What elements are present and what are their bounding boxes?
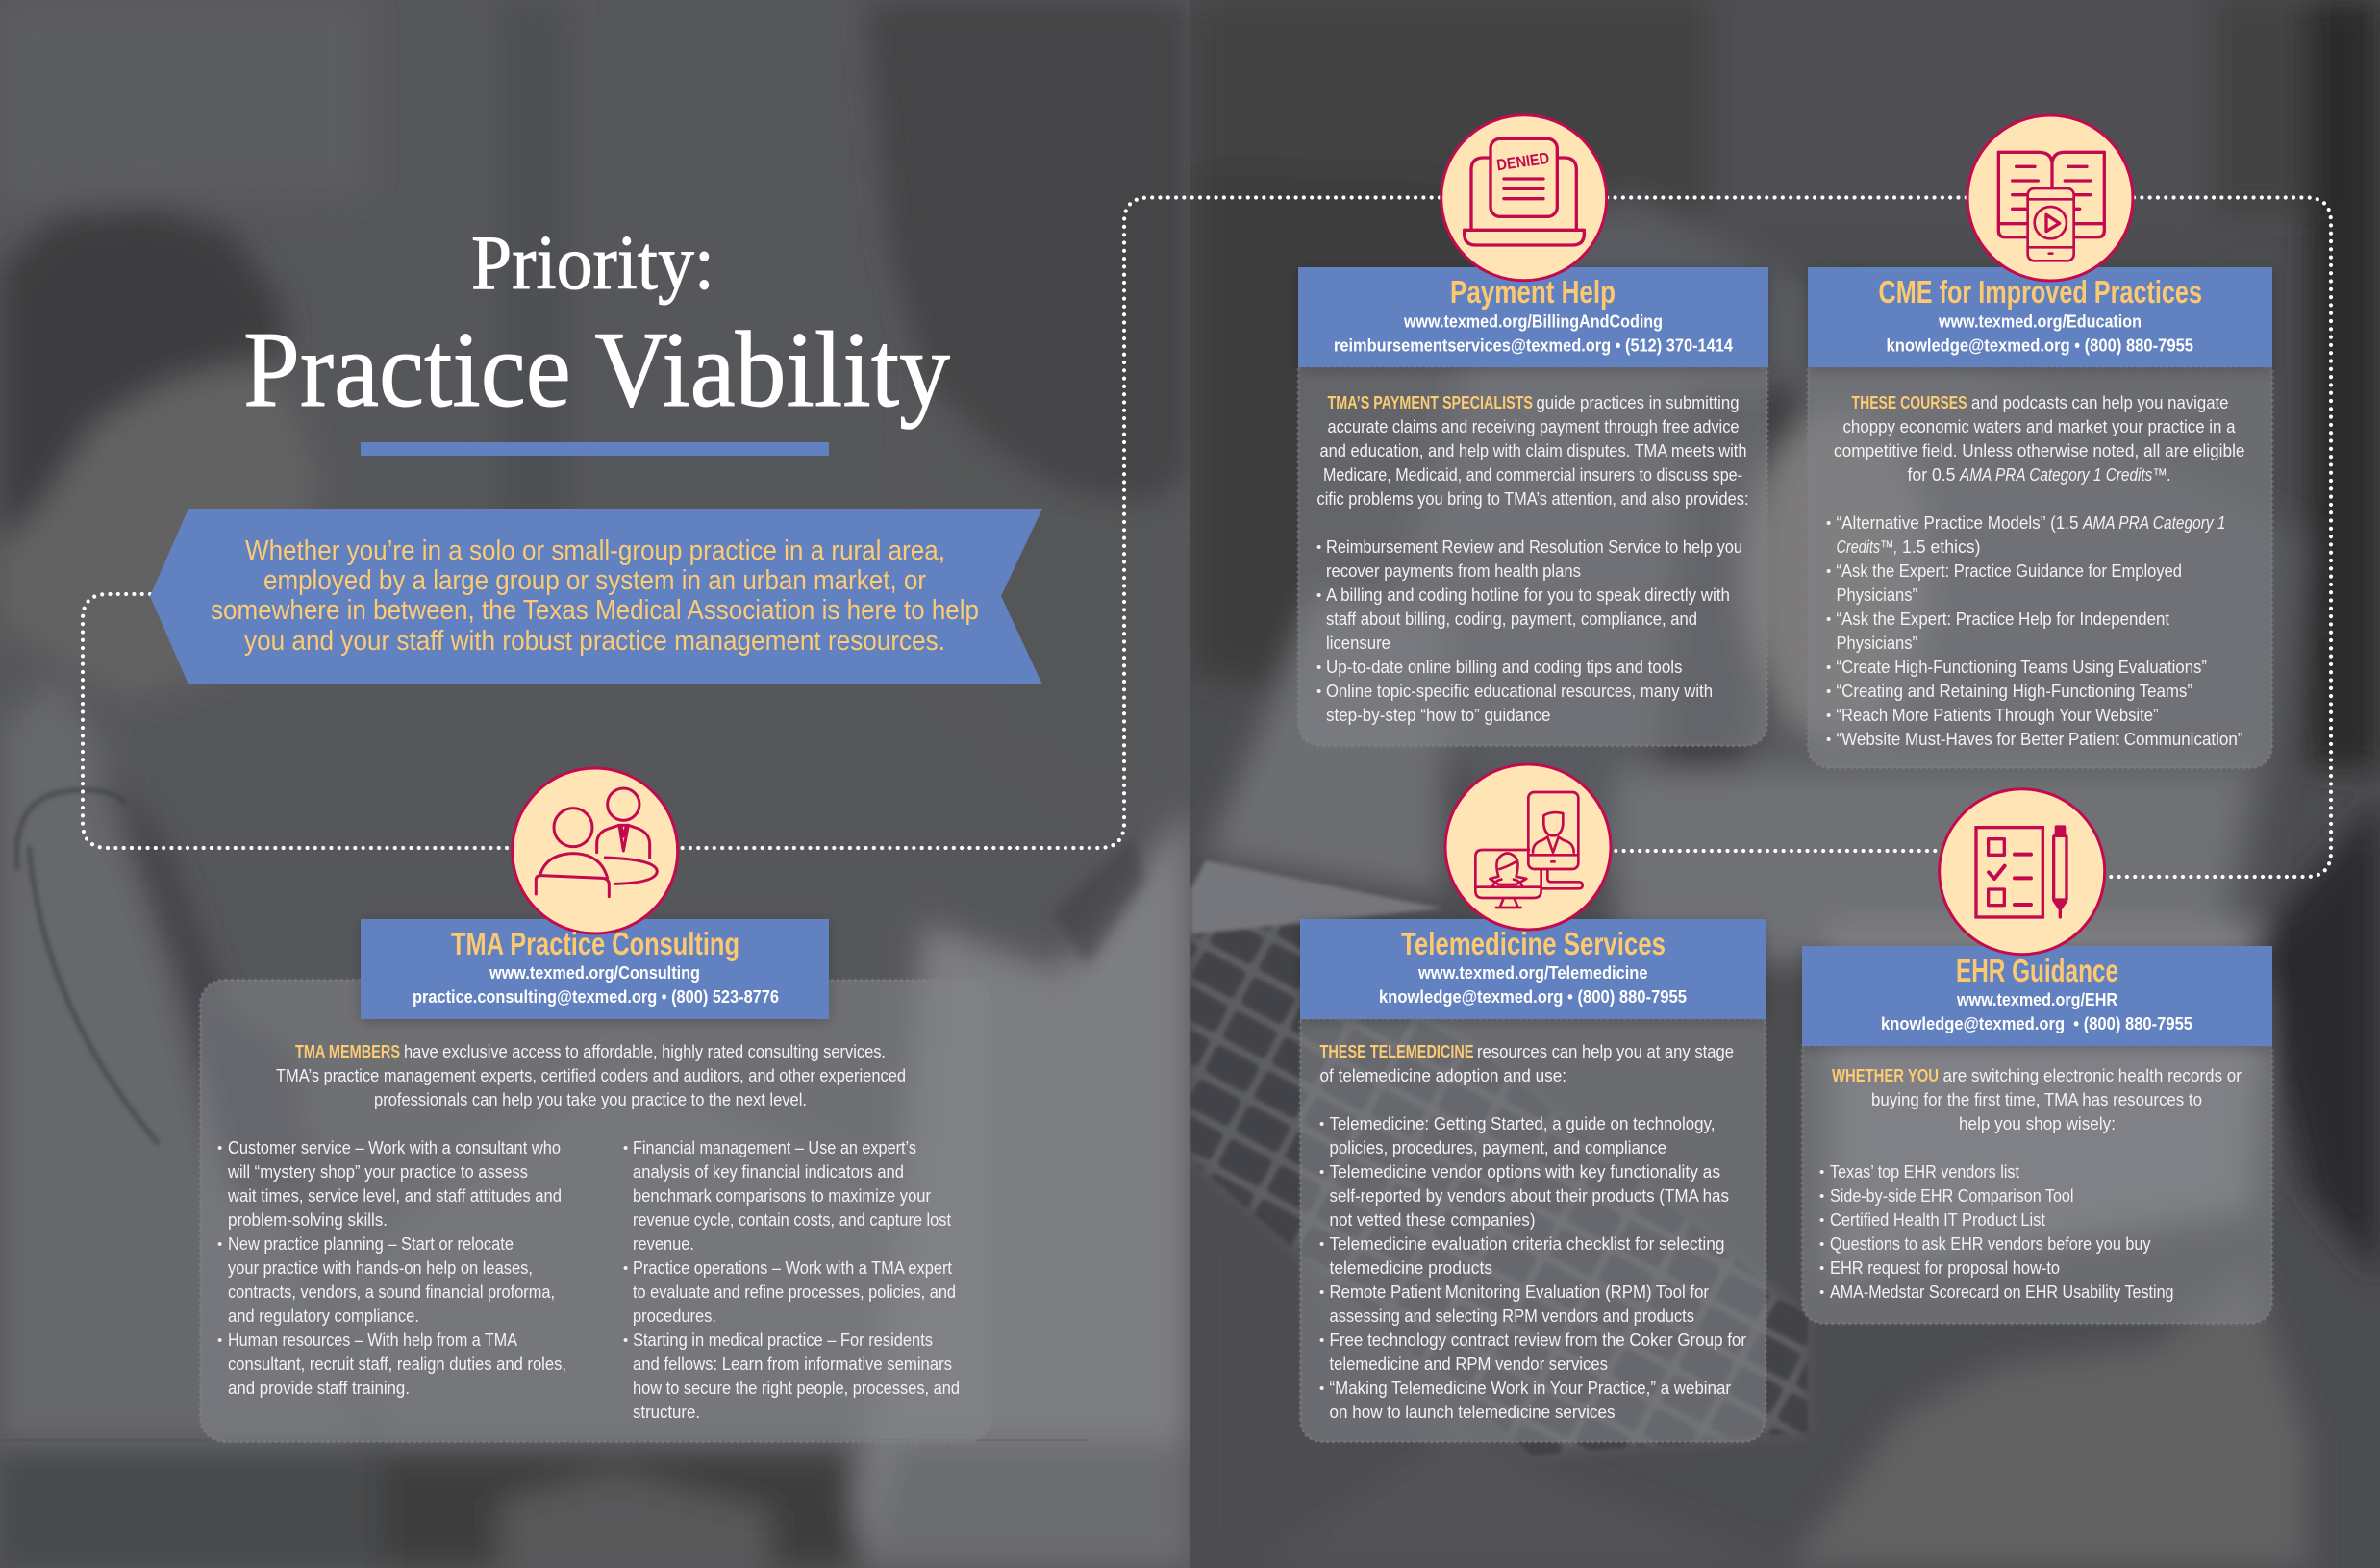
consulting bullet list: right column: benchmark comparisons to maximize your: [633, 1185, 931, 1206]
telemedicine bullet list: self-reported by vendors about their products (TMA has: [1329, 1185, 1729, 1206]
payment intro text: TMA’S PAYMENT SPECIALISTS: [1327, 392, 1533, 412]
payment bullet list: A billing and coding hotline for you to speak directly with: [1326, 585, 1730, 605]
EHR bullet list: AMA-Medstar Scorecard on EHR Usability Testing: [1830, 1282, 2173, 1302]
banner text: employed by a large group or system in an urban market, or: [263, 565, 926, 596]
consulting bullet list: left column: •: [217, 1236, 222, 1253]
EHR intro text: [1832, 1065, 2242, 1133]
payment body card: [1298, 367, 1767, 746]
consulting bullet list: right column: Financial management – Use an expert’s: [633, 1137, 916, 1157]
payment intro text: Medicare, Medicaid, and commercial insurers to discuss spe-: [1323, 464, 1742, 485]
consulting bullet list: right column: •: [623, 1332, 628, 1349]
telemedicine bullet list: Telemedicine evaluation criteria checklist for selecting: [1329, 1233, 1725, 1254]
EHR bullet list: EHR request for proposal how-to: [1830, 1257, 2060, 1278]
payment intro text: and education, and help with claim disputes. TMA meets with: [1319, 440, 1746, 460]
consulting bullet list: right column: revenue cycle, contain costs, and capture lost: [633, 1209, 951, 1230]
EHR heading and contacts: knowledge@texmed.org • (800) 880-7955: [1881, 1014, 2192, 1033]
telemedicine intro text: of telemedicine adoption and use:: [1319, 1065, 1566, 1085]
CME bullet list: “Create High-Functioning Teams Using Evaluations”: [1837, 657, 2207, 677]
consulting bullet list: left column: and provide staff training.: [228, 1378, 410, 1398]
CME bullet list: •: [1826, 684, 1831, 700]
payment bullet list: step-by-step “how to” guidance: [1326, 705, 1550, 725]
CME bullet list: “Ask the Expert: Practice Guidance for Employed: [1837, 560, 2182, 581]
banner text: you and your staff with robust practice management resources.: [244, 626, 945, 657]
EHR bullet list: •: [1819, 1284, 1824, 1301]
payment bullet list: •: [1316, 539, 1321, 556]
panel: CME for Improved Practices: [1808, 115, 2272, 768]
consulting bullet list: right column: [623, 1137, 960, 1422]
banner text: [211, 535, 979, 657]
consulting bullet list: left column: Human resources – With help from a TMA: [228, 1330, 518, 1350]
payment bullet list: staff about billing, coding, payment, compliance, and: [1326, 609, 1697, 629]
panel: EHR Guidance: [1802, 789, 2272, 1324]
CME bullet list: •: [1826, 708, 1831, 724]
EHR intro text: WHETHER YOU: [1832, 1065, 1939, 1085]
banner: [150, 509, 1042, 684]
EHR bullet list: •: [1819, 1188, 1824, 1205]
consulting intro text: TMA MEMBERS: [295, 1041, 400, 1061]
EHR header bar: [1802, 946, 2272, 1046]
CME bullet list: “Creating and Retaining High-Functioning Teams”: [1837, 681, 2192, 701]
consulting intro text: [276, 1041, 906, 1109]
telemedicine heading and contacts: [1379, 926, 1687, 1007]
telemedicine bullet list: •: [1319, 1236, 1324, 1253]
background: right photo of laptop video call (approximation): [1190, 0, 2380, 1568]
CME header bar: [1808, 267, 2272, 367]
EHR intro text: buying for the first time, TMA has resources to: [1871, 1089, 2202, 1109]
telemedicine bullet list: •: [1319, 1381, 1324, 1397]
CME icon: open book and phone with play button: [1967, 115, 2133, 281]
CME intro text: for 0.5: [1908, 464, 1956, 485]
CME bullet list: •: [1826, 515, 1831, 532]
CME bullet list: [1826, 512, 2242, 749]
payment intro text: [1317, 392, 1748, 509]
CME heading and contacts: www.texmed.org/Education: [1938, 311, 2142, 331]
consulting bullet list: left column: wait times, service level, and staff attitudes and: [227, 1185, 562, 1206]
payment intro text: accurate claims and receiving payment through free advice: [1327, 416, 1739, 436]
banner text: Whether you’re in a solo or small-group practice in a rural area,: [245, 535, 945, 566]
consulting bullet list: left column: [217, 1137, 566, 1398]
payment bullet list: •: [1316, 684, 1321, 700]
consulting bullet list: right column: to evaluate and refine processes, policies, and: [633, 1282, 956, 1302]
consulting bullet list: right column: •: [623, 1260, 628, 1277]
telemedicine bullet list: •: [1319, 1332, 1324, 1349]
telemedicine bullet list: on how to launch telemedicine services: [1329, 1402, 1616, 1422]
CME intro text: THESE COURSES: [1852, 392, 1967, 412]
EHR bullet list: Side-by-side EHR Comparison Tool: [1830, 1185, 2073, 1206]
consulting bullet list: right column: how to secure the right people, processes, and: [633, 1378, 960, 1398]
CME heading and contacts: CME for Improved Practices: [1879, 274, 2202, 310]
payment icon: denied claim on laptop: [1441, 115, 1607, 281]
payment bullet list: [1316, 536, 1742, 725]
CME bullet list: AMA PRA Category 1: [2082, 512, 2225, 533]
CME bullet list: Credits™,: [1837, 536, 1898, 557]
title: [243, 221, 950, 430]
consulting bullet list: right column: procedures.: [633, 1306, 716, 1326]
EHR heading and contacts: www.texmed.org/EHR: [1956, 990, 2117, 1009]
consulting bullet list: left column: •: [217, 1332, 222, 1349]
CME intro text: competitive field. Unless otherwise noted, all are eligible: [1834, 440, 2244, 460]
consulting intro text: TMA’s practice management experts, certified coders and auditors, and other experienced: [276, 1065, 906, 1085]
payment intro text: guide practices in submitting: [1537, 392, 1739, 412]
background: left photo of doctors (approximation): [0, 0, 1190, 1568]
CME bullet list: “Website Must-Haves for Better Patient Communication”: [1837, 729, 2242, 749]
telemedicine bullet list: “Making Telemedicine Work in Your Practice,” a webinar: [1329, 1378, 1731, 1398]
consulting bullet list: right column: •: [623, 1140, 628, 1157]
telemedicine body card: [1300, 1019, 1766, 1442]
payment bullet list: •: [1316, 587, 1321, 604]
consulting bullet list: left column: •: [217, 1140, 222, 1157]
EHR heading and contacts: [1881, 953, 2192, 1033]
payment heading and contacts: [1334, 274, 1733, 356]
payment bullet list: Reimbursement Review and Resolution Service to help you: [1326, 536, 1742, 557]
telemedicine intro text: THESE TELEMEDICINE: [1319, 1041, 1473, 1061]
payment bullet list: Up-to-date online billing and coding tips and tools: [1326, 657, 1683, 677]
payment heading and contacts: Payment Help: [1450, 274, 1616, 310]
EHR bullet list: •: [1819, 1164, 1824, 1181]
EHR heading and contacts: EHR Guidance: [1956, 953, 2118, 988]
consulting heading and contacts: www.texmed.org/Consulting: [489, 963, 700, 983]
title rule: [361, 442, 829, 456]
EHR bullet list: Questions to ask EHR vendors before you buy: [1830, 1233, 2151, 1254]
EHR intro text: are switching electronic health records or: [1942, 1065, 2242, 1085]
telemedicine bullet list: telemedicine and RPM vendor services: [1329, 1354, 1608, 1374]
CME intro text: [1834, 392, 2244, 485]
dotted connector: telemedicine to EHR: [1528, 849, 2021, 853]
telemedicine icon: doctor on phone, patient on monitor: [1445, 764, 1611, 930]
consulting bullet list: left column: Customer service – Work with a consultant who: [228, 1137, 561, 1157]
EHR bullet list: Certified Health IT Product List: [1830, 1209, 2045, 1230]
consulting bullet list: left column: contracts, vendors, a sound financial proforma,: [228, 1282, 555, 1302]
title line: Priority: Priority:: [471, 221, 714, 306]
payment intro text: cific problems you bring to TMA’s attention, and also provides:: [1317, 488, 1748, 509]
CME intro text: and podcasts can help you navigate: [1971, 392, 2229, 412]
CME intro text: choppy economic waters and market your practice in a: [1842, 416, 2236, 436]
telemedicine bullet list: not vetted these companies): [1329, 1209, 1535, 1230]
telemedicine bullet list: •: [1319, 1116, 1324, 1132]
CME bullet list: •: [1826, 732, 1831, 748]
telemedicine bullet list: assessing and selecting RPM vendors and products: [1329, 1306, 1694, 1326]
telemedicine intro text: resources can help you at any stage: [1477, 1041, 1734, 1061]
telemedicine bullet list: •: [1319, 1284, 1324, 1301]
CME heading and contacts: knowledge@texmed.org • (800) 880-7955: [1887, 336, 2193, 356]
banner text: somewhere in between, the Texas Medical Association is here to help: [211, 595, 979, 626]
consulting bullet list: right column: Starting in medical practice – For residents: [633, 1330, 933, 1350]
CME bullet list: •: [1826, 611, 1831, 628]
telemedicine bullet list: •: [1319, 1164, 1324, 1181]
consulting bullet list: right column: structure.: [633, 1402, 700, 1422]
consulting heading and contacts: practice.consulting@texmed.org • (800) 523-8776: [413, 987, 779, 1007]
consulting bullet list: left column: will “mystery shop” your practice to assess: [227, 1161, 528, 1182]
telemedicine heading and contacts: knowledge@texmed.org • (800) 880-7955: [1379, 987, 1687, 1007]
consulting intro text: professionals can help you take you practice to the next level.: [374, 1089, 807, 1109]
telemedicine heading and contacts: www.texmed.org/Telemedicine: [1417, 963, 1648, 983]
EHR icon: checklist and pen: [1940, 789, 2105, 955]
consulting bullet list: right column: analysis of key financial indicators and: [633, 1161, 904, 1182]
title line: Practice Viability: Practice Viability: [243, 311, 950, 430]
consulting bullet list: left column: New practice planning – Start or relocate: [228, 1233, 514, 1254]
EHR body card: [1802, 1046, 2272, 1324]
payment bullet list: Online topic-specific educational resources, many with: [1326, 681, 1713, 701]
CME intro text: AMA PRA Category 1 Credits™.: [1959, 464, 2171, 485]
telemedicine header bar: [1300, 919, 1766, 1019]
payment icon: denied claim on laptop: DENIED: [1495, 149, 1550, 174]
telemedicine bullet list: Free technology contract review from the Coker Group for: [1329, 1330, 1746, 1350]
CME bullet list: Physicians”: [1837, 633, 1917, 653]
telemedicine bullet list: policies, procedures, payment, and compliance: [1329, 1137, 1666, 1157]
telemedicine bullet list: Telemedicine: Getting Started, a guide on technology,: [1329, 1113, 1716, 1133]
panel: Telemedicine Services: [1300, 764, 1766, 1442]
consulting intro text: have exclusive access to affordable, highly rated consulting services.: [404, 1041, 886, 1061]
payment heading and contacts: www.texmed.org/BillingAndCoding: [1403, 311, 1663, 331]
payment bullet list: licensure: [1326, 633, 1390, 653]
EHR bullet list: •: [1819, 1212, 1824, 1229]
telemedicine bullet list: Telemedicine vendor options with key functionality as: [1329, 1161, 1720, 1182]
consulting bullet list: right column: revenue.: [633, 1233, 694, 1254]
consulting header bar: [361, 919, 829, 1019]
EHR bullet list: Texas’ top EHR vendors list: [1830, 1161, 2019, 1182]
EHR intro text: help you shop wisely:: [1959, 1113, 2116, 1133]
banner ribbon: [150, 509, 1042, 684]
EHR bullet list: [1819, 1161, 2173, 1302]
telemedicine intro text: [1319, 1041, 1734, 1085]
telemedicine bullet list: telemedicine products: [1329, 1257, 1492, 1278]
CME bullet list: “Ask the Expert: Practice Help for Independent: [1837, 609, 2169, 629]
payment bullet list: recover payments from health plans: [1326, 560, 1581, 581]
EHR bullet list: •: [1819, 1260, 1824, 1277]
CME body card: [1808, 367, 2272, 768]
payment header bar: [1298, 267, 1768, 367]
consulting heading and contacts: [413, 926, 779, 1007]
CME bullet list: •: [1826, 563, 1831, 580]
telemedicine bullet list: Remote Patient Monitoring Evaluation (RPM) Tool for: [1329, 1282, 1709, 1302]
consulting bullet list: left column: and regulatory compliance.: [228, 1306, 419, 1326]
CME bullet list: “Reach More Patients Through Your Website”: [1837, 705, 2158, 725]
consulting heading and contacts: TMA Practice Consulting: [451, 926, 739, 961]
CME bullet list: “Alternative Practice Models” (1.5: [1837, 512, 2079, 533]
consulting body card: [200, 980, 991, 1442]
panel: TMA Practice Consulting: [200, 768, 991, 1442]
consulting icon: two people at a table: [513, 768, 678, 933]
consulting bullet list: left column: consultant, recruit staff, realign duties and roles,: [228, 1354, 566, 1374]
CME bullet list: •: [1826, 660, 1831, 676]
EHR bullet list: •: [1819, 1236, 1824, 1253]
consulting bullet list: right column: and fellows: Learn from informative seminars: [633, 1354, 952, 1374]
telemedicine heading and contacts: Telemedicine Services: [1401, 926, 1666, 961]
consulting bullet list: right column: Practice operations – Work with a TMA expert: [633, 1257, 952, 1278]
payment heading and contacts: reimbursementservices@texmed.org • (512) 370-1414: [1334, 336, 1733, 356]
dotted connector: left loop and top run: [83, 198, 2331, 877]
consulting bullet list: left column: your practice with hands-on help on leases,: [228, 1257, 533, 1278]
telemedicine bullet list: [1319, 1113, 1746, 1422]
CME bullet list: Physicians”: [1837, 585, 1917, 605]
CME heading and contacts: [1879, 274, 2202, 356]
payment bullet list: •: [1316, 660, 1321, 676]
consulting bullet list: left column: problem-solving skills.: [228, 1209, 388, 1230]
CME bullet list: 1.5 ethics): [1902, 536, 1981, 557]
panel: Payment Help: [1298, 115, 1768, 746]
